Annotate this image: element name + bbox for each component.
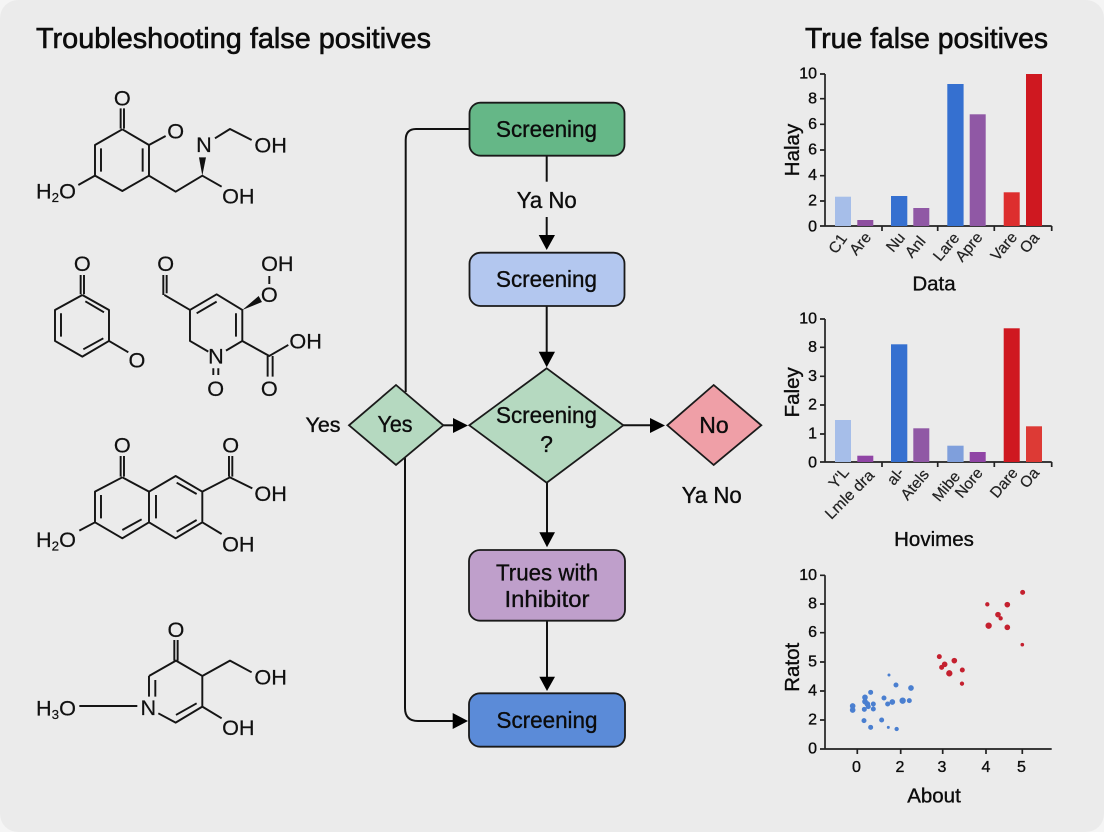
title: troubleshooting false positives: Troubleshooting false positives (36, 23, 431, 55)
decision: screening question: ? (540, 431, 553, 457)
molecule 3: 2 (52, 538, 59, 553)
molecule 4: H (36, 696, 52, 721)
y tick labels: 0 (808, 740, 817, 758)
x labels: Are (846, 229, 875, 259)
molecule 1: OH (254, 133, 287, 158)
x axis title: About (907, 784, 961, 808)
x labels: Nore (952, 465, 987, 502)
box: screening light blue (470, 253, 624, 306)
y tick labels: 2 (808, 712, 817, 728)
molecule 4: OH (222, 715, 255, 740)
molecule 3: H (36, 527, 52, 552)
x labels: C1 (826, 231, 851, 257)
x tick labels (852, 759, 1026, 776)
x labels: Y'L (826, 464, 853, 492)
x labels: Atels (898, 466, 933, 504)
x labels: Lare (930, 230, 963, 265)
x tick labels: 2 (896, 759, 905, 776)
connector: top box to lower box loop (405, 129, 470, 721)
y tick labels: 5 (808, 654, 817, 670)
y tick labels: 8 (808, 596, 817, 612)
decision: yes (349, 385, 443, 465)
y tick labels: 10 (799, 66, 817, 82)
molecule 1: OH (222, 184, 255, 209)
arrow: decision to no (623, 418, 665, 433)
y axis title: Faley (781, 366, 804, 417)
x labels: Anl (902, 233, 929, 261)
molecule 2 right: OH (261, 251, 294, 276)
molecule 4: 3 (52, 707, 59, 722)
molecule 3 (36, 433, 287, 557)
arrow: to second box (539, 217, 555, 250)
y axis title: Ratot (781, 642, 804, 692)
x tick labels: 0 (852, 759, 861, 776)
title: true false positives: True false positives (805, 23, 1048, 55)
molecule 1: O (59, 179, 76, 204)
label: ya no top: Ya No (517, 187, 577, 213)
molecule 4 (36, 617, 287, 740)
x labels (822, 464, 1043, 523)
molecule 3: O (114, 433, 131, 458)
molecule 2 left: O (74, 251, 91, 276)
box: screening green (470, 103, 624, 156)
molecule 4: N (140, 695, 156, 720)
y tick labels: 0 (808, 218, 817, 236)
y tick labels: 0 (808, 454, 817, 472)
axes (820, 74, 1052, 231)
x labels: al- (884, 465, 908, 489)
x tick labels: 5 (1017, 759, 1026, 776)
box: screening green: Screening (496, 116, 597, 142)
y tick labels (799, 567, 817, 758)
axes (820, 319, 1052, 467)
y tick labels (799, 66, 817, 236)
molecule 3: OH (222, 532, 255, 557)
x axis title: Data (912, 272, 956, 296)
x labels: Mibe (929, 468, 964, 505)
y tick labels: 4 (808, 682, 817, 700)
x labels: Apre (952, 229, 986, 265)
molecule 1: N (196, 132, 212, 157)
decision: screening question (469, 368, 623, 483)
box: screening blue: Screening (496, 707, 598, 733)
x labels: Nu (883, 230, 909, 256)
decision: yes: Yes (378, 411, 412, 437)
box: trues with inhibitor: Trues with (496, 560, 598, 586)
arrow: yes to decision (443, 418, 468, 433)
panel: chemical structures (36, 85, 322, 740)
box: screening light blue: Screening (496, 266, 597, 292)
x labels (826, 229, 1043, 265)
molecule 3: OH (254, 481, 287, 506)
molecule 2 right: O (207, 376, 224, 401)
molecule 4: O (168, 617, 184, 642)
x labels: Oa (1017, 465, 1043, 492)
x labels: Oa (1017, 230, 1043, 257)
box: trues with inhibitor: Inhibitor (504, 586, 590, 612)
molecule 1: H (36, 179, 52, 204)
molecule 2 right: O (261, 376, 278, 401)
x axis title: Hovimes (894, 528, 974, 551)
molecule 2 left (55, 251, 145, 373)
red points (937, 590, 1025, 685)
molecule 2 right: O (261, 282, 278, 307)
y tick labels: 3 (808, 368, 817, 385)
molecule 2 right (157, 251, 322, 401)
molecule 1 (36, 85, 287, 209)
molecule 1: 2 (52, 190, 59, 205)
arrow: inhibitor to bottom box (539, 621, 555, 691)
bars (835, 74, 1042, 226)
x labels: Lmle dra (822, 467, 878, 523)
y tick labels (799, 310, 817, 472)
molecule 4: OH (254, 664, 287, 689)
y tick labels: 6 (808, 142, 817, 158)
x tick labels: 4 (982, 759, 991, 776)
x labels: Vare (988, 229, 1021, 264)
scatter chart: ratot vs about (781, 567, 1052, 808)
decision: no: No (699, 412, 729, 438)
label: ya no right: Ya No (682, 482, 742, 508)
molecule 1: O (167, 119, 184, 144)
arrow: to decision (539, 306, 555, 367)
molecule 3: O (222, 433, 239, 458)
y tick labels: 8 (808, 339, 817, 356)
y tick labels: 10 (799, 567, 817, 584)
y tick labels: 2 (808, 192, 817, 210)
molecule 2 right: O (157, 251, 174, 276)
decision: no (667, 385, 761, 465)
connector: screening to label (546, 156, 548, 182)
molecule 3: O (59, 527, 76, 552)
molecule 2 right: OH (289, 328, 322, 353)
bars (835, 328, 1042, 462)
bar chart: faley (781, 310, 1052, 551)
box: screening blue (469, 693, 625, 747)
x tick labels: 3 (938, 759, 947, 776)
blue points (850, 674, 913, 731)
molecule 2 left: O (129, 348, 145, 373)
arrow: into bottom box from left (453, 713, 468, 729)
y tick labels: 1 (808, 426, 817, 442)
molecule 1: O (114, 85, 131, 110)
axes (820, 575, 1052, 754)
y tick labels: 4 (808, 167, 817, 184)
y tick labels: 6 (808, 116, 817, 133)
y tick labels: 6 (808, 624, 817, 641)
molecule 2 right: N (208, 344, 224, 369)
y tick labels: 8 (808, 90, 817, 108)
molecule 4: O (59, 696, 76, 721)
box: trues with inhibitor (469, 550, 625, 621)
arrow: decision to inhibitor (539, 483, 555, 547)
y tick labels: 2 (808, 396, 817, 414)
y axis title: Halay (781, 123, 804, 176)
bar chart: halay (781, 66, 1052, 296)
label: yes left: Yes (306, 414, 340, 437)
x labels: Dare (987, 465, 1022, 502)
decision: screening question: Screening (496, 402, 597, 428)
flowchart (306, 103, 761, 747)
y tick labels: 10 (799, 310, 817, 328)
